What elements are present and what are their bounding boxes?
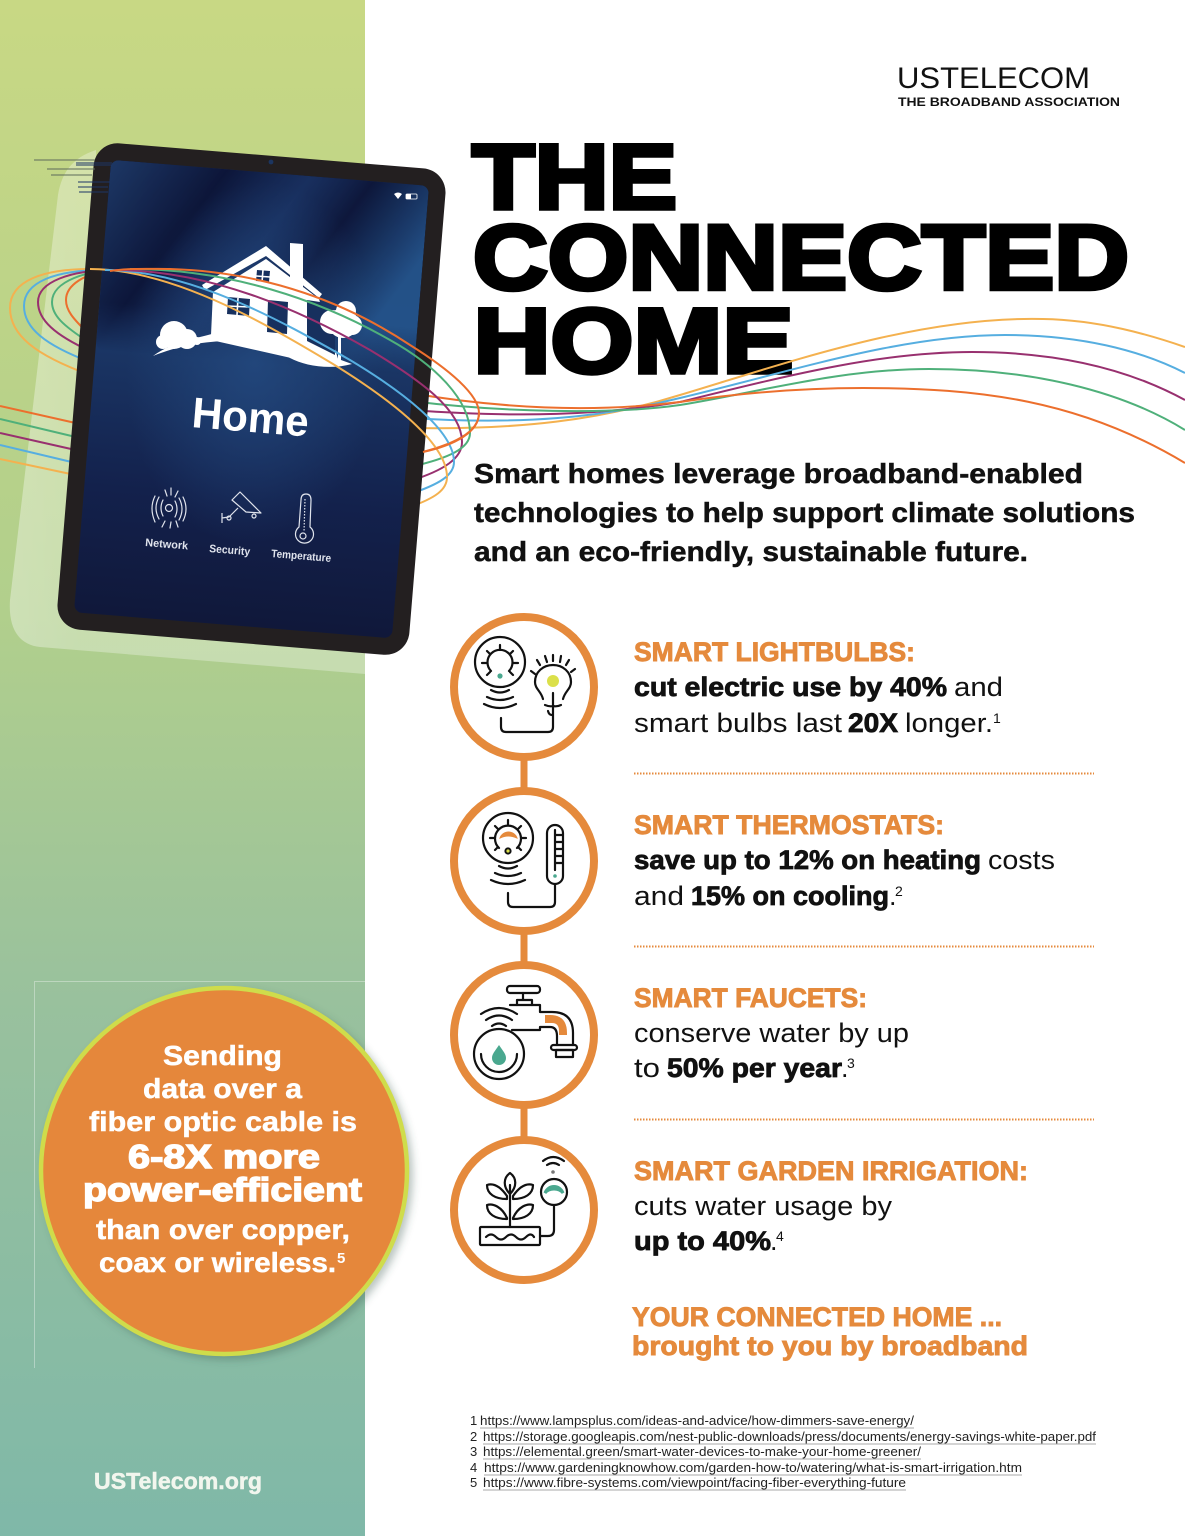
text: smart thermostats: and xyxy=(634,881,684,911)
title: CONNECTED xyxy=(473,207,1129,309)
divider 1 xyxy=(634,772,1094,774)
footnotes: 2 xyxy=(470,1429,477,1444)
text: smart lightbulbs xyxy=(634,637,1003,738)
text: smart faucets xyxy=(634,983,909,1083)
title: HOME xyxy=(474,291,794,393)
footnotes: 1 xyxy=(470,1413,477,1428)
icon: security camera xyxy=(222,492,261,523)
text: smart lightbulbs: cut electric use by 40% xyxy=(634,672,947,702)
icon: smart lightbulb xyxy=(454,617,594,757)
icon: smart faucet xyxy=(454,965,594,1105)
speed lines at tablet corner xyxy=(34,160,112,192)
callout: fiber efficiency circle: Sending xyxy=(163,1040,282,1071)
text: smart garden irrigation: 4 xyxy=(776,1228,784,1244)
screen heading: Home: Home xyxy=(190,389,311,447)
screen labels: Temperature xyxy=(271,548,332,565)
text: smart thermostats: SMART THERMOSTATS: xyxy=(634,810,944,840)
divider 2 xyxy=(634,946,1094,948)
text: smart garden irrigation: cuts water usage by xyxy=(634,1191,893,1221)
callout: fiber efficiency circle: fiber optic cable is xyxy=(89,1106,357,1137)
tablet screen xyxy=(74,160,429,638)
footnotes: 3 xyxy=(470,1444,477,1459)
footnotes: https://www.lampsplus.com/ideas-and-advice/how-dimmers-save-energy/ xyxy=(480,1413,914,1428)
camera dot xyxy=(269,160,273,164)
callout: fiber efficiency circle: coax or wireless. xyxy=(99,1247,336,1278)
divider 3 xyxy=(634,1118,1094,1120)
text: smart thermostats: save up to 12% on heating xyxy=(634,845,981,875)
closing tagline: brought to you by broadband xyxy=(632,1331,1028,1361)
callout frame outline xyxy=(34,982,365,1368)
footnotes: 5 xyxy=(470,1475,477,1490)
callout: fiber efficiency circle xyxy=(41,988,413,1360)
icon: smart garden irrigation xyxy=(454,1140,594,1280)
text: smart thermostats: 15% on cooling xyxy=(691,881,889,911)
icon: house on hill xyxy=(153,243,362,367)
wires: sweeping lines to right edge xyxy=(410,319,1185,463)
intro text: technologies to help support climate solutions xyxy=(474,497,1135,528)
text: smart thermostats: costs xyxy=(988,845,1055,875)
intro text xyxy=(474,458,1135,567)
callout: fiber efficiency circle: than over copper, xyxy=(96,1214,350,1245)
text: smart faucets: to xyxy=(634,1053,660,1083)
text: smart faucets: . xyxy=(841,1053,849,1083)
closing tagline: YOUR CONNECTED HOME ... xyxy=(632,1302,1002,1332)
footnotes: https://www.fibre-systems.com/viewpoint/facing-fiber-everything-future xyxy=(483,1475,906,1490)
screen labels: Network xyxy=(145,537,189,553)
callout: fiber efficiency circle: 6-8X more xyxy=(128,1138,320,1175)
tablet body xyxy=(56,141,447,657)
text: smart faucets: SMART FAUCETS: xyxy=(634,983,867,1013)
wires: loop tails behind tablet xyxy=(10,269,479,507)
logo: USTelecom xyxy=(897,62,1120,109)
logo: USTelecom: USTELECOM xyxy=(897,62,1090,95)
title: THE xyxy=(472,127,677,229)
intro text: and an eco-friendly, sustainable future. xyxy=(474,536,1028,567)
closing tagline xyxy=(632,1302,1028,1361)
text: smart lightbulbs: and xyxy=(954,672,1003,702)
text: smart lightbulbs: longer. xyxy=(905,708,993,738)
text: smart garden irrigation xyxy=(634,1156,1028,1256)
website link: USTelecom.org xyxy=(94,1468,262,1494)
footnotes: https://www.gardeningknowhow.com/garden-how-to/watering/what-is-smart-irrigation.htm xyxy=(484,1460,1022,1475)
text: smart thermostats xyxy=(634,810,1055,911)
text: smart garden irrigation: up to 40% xyxy=(634,1226,771,1256)
callout: fiber efficiency circle: power-efficient xyxy=(83,1171,362,1208)
text: smart lightbulbs: smart bulbs last xyxy=(634,708,843,738)
tablet xyxy=(56,141,447,657)
text: smart faucets: 50% per year xyxy=(667,1053,843,1083)
icon: thermometer xyxy=(296,494,314,543)
logo: USTelecom: THE BROADBAND ASSOCIATION xyxy=(898,95,1120,109)
text: smart thermostats: 2 xyxy=(895,883,903,899)
icon: network xyxy=(152,488,186,528)
footnotes xyxy=(470,1413,1096,1490)
wires: left entry behind tablet xyxy=(0,406,80,476)
intro text: Smart homes leverage broadband-enabled xyxy=(474,458,1083,489)
wires: loops passing in front of tablet xyxy=(90,269,479,477)
text: smart faucets: conserve water by up xyxy=(634,1018,909,1048)
title xyxy=(472,127,1129,393)
connector lines between circles xyxy=(520,750,528,1150)
tablet soft backdrop shape xyxy=(10,150,365,674)
screen labels xyxy=(145,537,332,565)
text: smart lightbulbs: 20X xyxy=(848,708,898,738)
text: smart garden irrigation: SMART GARDEN IRRIGATION: xyxy=(634,1156,1028,1186)
status icons xyxy=(394,192,417,199)
callout: fiber efficiency circle: 5 xyxy=(337,1250,345,1267)
text: smart lightbulbs: SMART LIGHTBULBS: xyxy=(634,637,915,667)
callout: fiber efficiency circle: data over a xyxy=(143,1073,302,1104)
footnotes: https://storage.googleapis.com/nest-public-downloads/press/documents/energy-savings-white-paper.pdf xyxy=(483,1429,1096,1444)
footnotes: https://elemental.green/smart-water-devices-to-make-your-home-greener/ xyxy=(483,1444,921,1459)
screen labels: Security xyxy=(209,543,251,558)
text: smart thermostats: . xyxy=(889,881,897,911)
text: smart faucets: 3 xyxy=(847,1055,855,1071)
text: smart lightbulbs: 1 xyxy=(993,710,1001,726)
footnotes: 4 xyxy=(470,1460,477,1475)
panel: green gradient sidebar xyxy=(0,0,365,1536)
text: smart garden irrigation: . xyxy=(770,1226,778,1256)
icon: smart thermostat xyxy=(454,791,594,931)
